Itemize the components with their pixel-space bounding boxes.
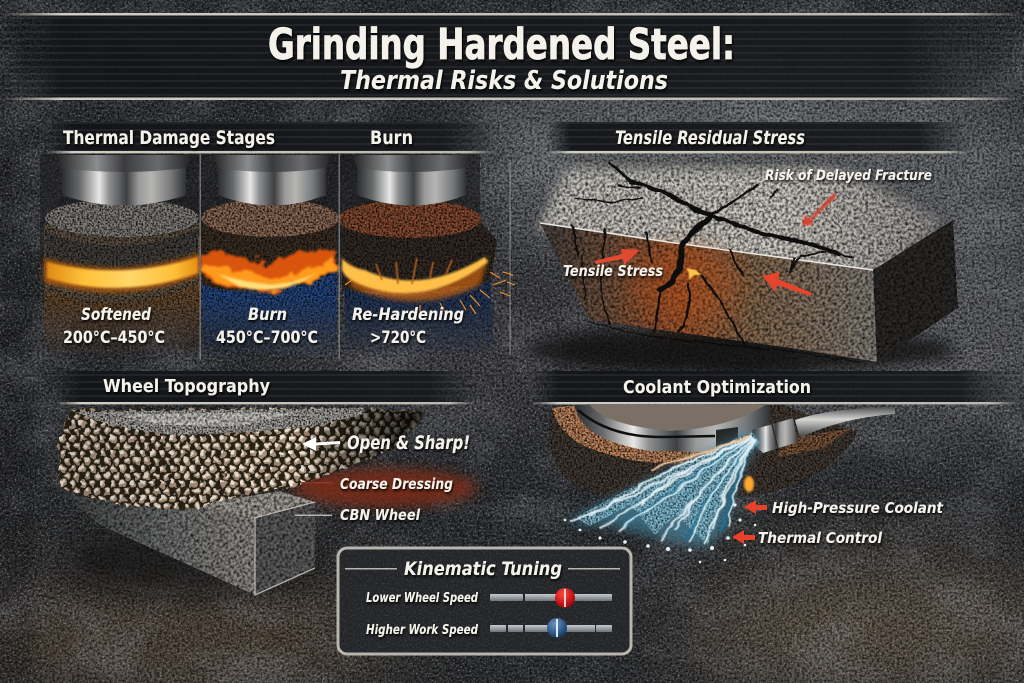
stray sparks	[503, 272, 515, 285]
subtitle: Thermal Risks & Solutions	[340, 66, 668, 96]
ember	[744, 476, 754, 492]
label: cbn wheel: CBN Wheel	[340, 506, 420, 524]
label: high-pressure coolant: High-Pressure Coolant	[772, 499, 944, 517]
header band: tensile: Tensile Residual Stress	[615, 127, 805, 149]
panel: wheel topography	[55, 371, 480, 595]
arrow: tensile stress left	[594, 249, 640, 265]
water spray	[565, 432, 760, 548]
stage labels: 200°C–450°C	[63, 328, 165, 348]
cracks	[572, 163, 860, 362]
slider: lower wheel speed	[366, 588, 612, 608]
arrow: tensile stress right	[762, 272, 812, 296]
dividers	[200, 154, 511, 359]
header band: coolant: Coolant Optimization	[623, 377, 811, 398]
arrow: open and sharp	[302, 437, 340, 451]
kinematic title: Kinematic Tuning	[404, 558, 562, 580]
stage 2: burn	[201, 154, 339, 360]
label: risk of delayed fracture: Risk of Delayed Fracture	[765, 168, 932, 184]
cylinder	[62, 168, 186, 206]
hot spot	[686, 268, 702, 280]
label: tensile stress: Tensile Stress	[563, 262, 663, 280]
slider: higher work speed: Higher Work Speed	[366, 623, 479, 638]
header band: tensile	[545, 122, 970, 153]
arrow: high-pressure coolant	[744, 500, 767, 514]
spindle	[575, 405, 770, 452]
header band: wheel topography: Wheel Topography	[103, 376, 270, 397]
stage labels: 450°C–700°C	[216, 328, 318, 348]
stage 3: re-hardening	[338, 154, 510, 360]
wheel abrasive grains	[58, 408, 425, 510]
header band: coolant	[530, 371, 1020, 404]
panel: kinematic tuning	[338, 548, 631, 654]
stage 1: softened	[40, 154, 200, 360]
title band	[0, 13, 1024, 100]
label: coarse dressing: Coarse Dressing	[340, 475, 453, 493]
leader: cbn wheel	[295, 514, 332, 516]
panel: coolant optimization	[530, 371, 1020, 563]
title: Grinding Hardened Steel:	[268, 20, 735, 70]
arrow: risk of delayed fracture	[803, 194, 836, 225]
sparks	[345, 272, 510, 314]
cylinder	[218, 168, 326, 206]
steel workpiece	[60, 491, 320, 595]
panel: thermal damage stages	[40, 122, 515, 360]
stage labels: Burn	[248, 305, 287, 325]
label: thermal control: Thermal Control	[758, 529, 882, 547]
arrow: thermal control	[732, 530, 755, 544]
slider: higher work speed	[366, 618, 612, 638]
stage labels	[63, 305, 464, 348]
leader: coarse dressing	[300, 482, 333, 484]
header band: thermal damage: Burn	[370, 127, 413, 149]
panel: tensile residual stress	[525, 122, 970, 374]
hose and nozzle	[752, 407, 895, 453]
label: open and sharp: Open & Sharp!	[347, 432, 470, 454]
stage labels: >720°C	[370, 328, 426, 348]
water droplets	[564, 503, 756, 563]
grinding wheel	[549, 405, 857, 505]
slider: lower wheel speed: Lower Wheel Speed	[366, 591, 479, 606]
cylinder	[357, 168, 466, 206]
header band: thermal damage	[46, 122, 496, 153]
header band: wheel topography	[55, 371, 480, 404]
header band: thermal damage: Thermal Damage Stages	[63, 127, 275, 149]
concrete block	[525, 160, 958, 374]
stage labels: Softened	[81, 305, 152, 325]
stage labels: Re-Hardening	[352, 305, 464, 325]
coarse dressing glow	[293, 469, 477, 507]
